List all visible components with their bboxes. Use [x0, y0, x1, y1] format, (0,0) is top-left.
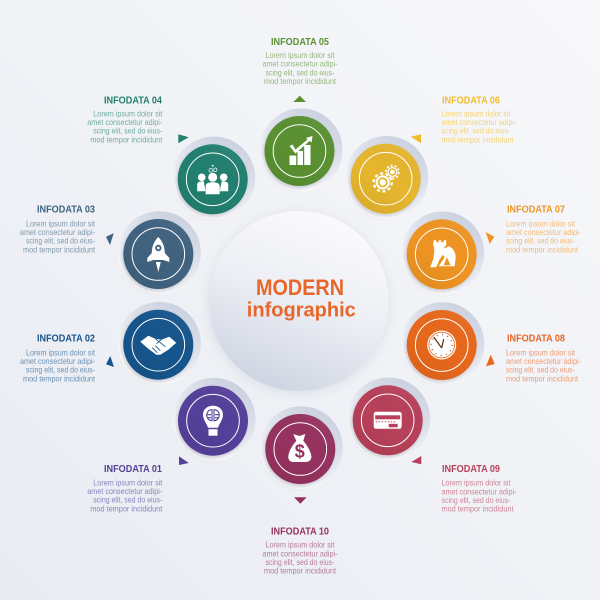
label 03: amet consectetur adipi- [20, 227, 95, 237]
label 07: INFODATA 07 [507, 204, 565, 216]
label 08: Lorem ipsum dolor sit [506, 347, 576, 357]
label 08 [506, 333, 581, 383]
label 04: scing elit, sed do eius- [93, 126, 162, 136]
label 07: mod tempor incididunt [506, 244, 579, 254]
node 08: clock [401, 302, 484, 385]
label 08: scing elit, sed do eius- [506, 365, 575, 375]
triangle 07 [486, 232, 494, 244]
label 07: scing elit, sed do eius- [506, 236, 575, 246]
label 01: INFODATA 01 [104, 463, 162, 475]
label 06: scing elit, sed do eius- [442, 126, 511, 136]
node 01: idea bulb [172, 378, 256, 461]
label 02 [20, 333, 96, 383]
icon: team [197, 165, 228, 194]
label 07 [506, 204, 581, 254]
label 09: amet consectetur adipi- [442, 486, 517, 496]
node 09: credit card [347, 378, 430, 460]
label 10: amet consectetur adipi- [262, 548, 338, 558]
subtitle: infographic [247, 300, 356, 322]
label 09: scing elit, sed do eius- [442, 495, 511, 505]
triangle 04 [178, 134, 189, 143]
label 09: Lorem ipsum dolor sit [442, 478, 511, 488]
icon: clock [427, 330, 456, 360]
label 02: Lorem ipsum dolor sit [26, 347, 96, 357]
label 01 [87, 463, 163, 513]
label 09: mod tempor incididunt [442, 504, 514, 514]
label 08: amet consectetur adipi- [506, 356, 581, 366]
node 02: handshake [118, 302, 201, 385]
label 05: mod tempor incididunt [264, 76, 337, 86]
icon: chart [290, 136, 312, 165]
label 08: INFODATA 08 [507, 333, 565, 345]
label 01: Lorem ipsum dolor sit [93, 477, 163, 487]
node 10: money bag [260, 406, 343, 489]
icon: chess pieces [430, 240, 456, 267]
icon: bulb with brain [203, 406, 223, 436]
label 05: scing elit, sed do eius- [266, 67, 335, 77]
node 07: chess [401, 212, 484, 294]
triangle 06 [411, 134, 421, 143]
label 09 [442, 463, 517, 514]
label 09: INFODATA 09 [442, 463, 500, 475]
label 05 [262, 36, 338, 86]
label 04: Lorem ipsum dolor sit [93, 108, 163, 118]
label 05: amet consectetur adipi- [262, 59, 338, 69]
icon: gears [374, 166, 399, 191]
label 01: amet consectetur adipi- [87, 486, 162, 496]
label 01: mod tempor incididunt [90, 503, 163, 513]
label 10: mod tempor incididunt [264, 566, 337, 576]
label 10 [262, 525, 338, 576]
label 07: Lorem ipsum dolor sit [506, 218, 576, 228]
triangle 03 [106, 233, 114, 245]
triangle 09 [411, 456, 421, 464]
label 04 [87, 94, 163, 144]
label 03 [20, 204, 96, 254]
label 06: mod tempor incididunt [442, 134, 514, 144]
label 06: Lorem ipsum dolor sit [442, 108, 511, 118]
label 06: amet consectetur adipi- [442, 117, 517, 127]
icon: money bag: $ [295, 442, 305, 462]
triangle 10 [294, 497, 307, 504]
label 07: amet consectetur adipi- [506, 227, 581, 237]
label 10: Lorem ipsum dolor sit [266, 540, 335, 550]
label 10: scing elit, sed do eius- [266, 557, 335, 567]
label 10: INFODATA 10 [271, 525, 329, 537]
label 05: INFODATA 05 [271, 36, 329, 48]
label 08: mod tempor incididunt [506, 373, 579, 383]
triangle 02 [106, 356, 114, 367]
icon: handshake [140, 336, 176, 355]
label 04: amet consectetur adipi- [87, 117, 162, 127]
label 05: Lorem ipsum dolor sit [266, 50, 335, 60]
label 03: scing elit, sed do eius- [26, 236, 95, 246]
node 05: growth chart [260, 108, 342, 192]
center circle [209, 211, 389, 391]
label 01: scing elit, sed do eius- [93, 495, 162, 505]
label 03: Lorem ipsum dolor sit [26, 218, 96, 228]
icon: rocket [147, 237, 169, 272]
label 02: amet consectetur adipi- [20, 356, 95, 366]
triangle 05 [293, 96, 306, 102]
label 03: INFODATA 03 [37, 204, 95, 216]
triangle 01 [179, 456, 189, 465]
icon: card [374, 412, 402, 429]
label 06: INFODATA 06 [442, 94, 500, 106]
label 06 [442, 94, 517, 144]
triangle 08 [486, 355, 495, 366]
label 04: INFODATA 04 [104, 94, 162, 106]
label 03: mod tempor incididunt [23, 244, 96, 254]
label 02: mod tempor incididunt [23, 373, 96, 383]
label 04: mod tempor incididunt [90, 134, 163, 144]
node 03: rocket [118, 211, 201, 294]
node 04: team [172, 136, 255, 220]
node 06: gears [345, 136, 428, 219]
label 02: INFODATA 02 [37, 333, 95, 345]
title: MODERN [256, 275, 344, 300]
label 02: scing elit, sed do eius- [26, 365, 95, 375]
